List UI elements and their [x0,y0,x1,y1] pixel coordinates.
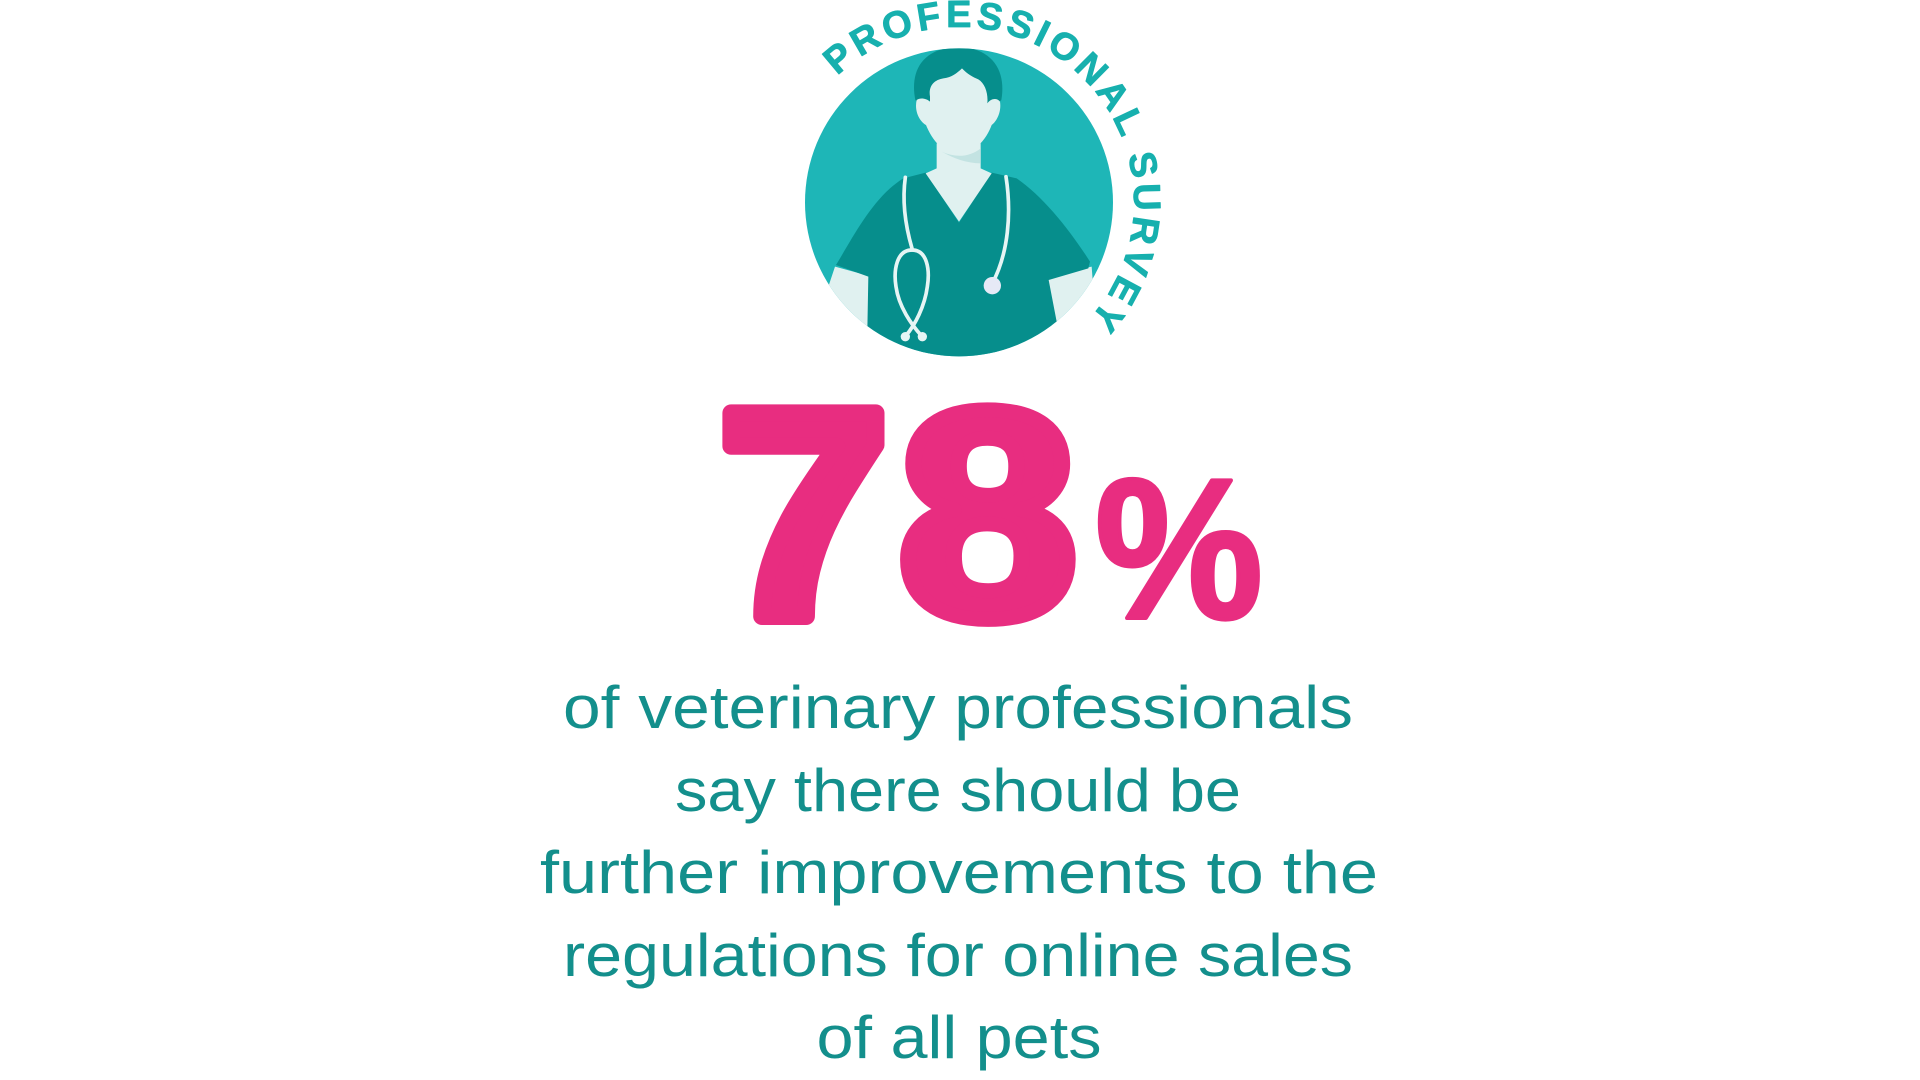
infographic [540,0,1375,1070]
description text: regulations for online sales [563,922,1353,989]
description text [540,674,1378,1071]
arms [829,266,1092,328]
curved label: professional survey: PROFESSIONAL SURVEY [822,0,1161,335]
scrubs [836,173,1090,367]
neck shadow [942,148,981,163]
head [916,68,1000,144]
stethoscope [895,177,1009,336]
hair [914,48,1002,103]
statistic: 78%: 8 [898,349,1077,680]
description text: of all pets [816,1004,1102,1071]
description text: further improvements to the [540,839,1378,906]
statistic: 78%: 7 [718,349,889,679]
description text: say there should be [675,757,1241,824]
statistic: 78% [718,349,1263,680]
description text: of veterinary professionals [563,674,1353,741]
neck [926,143,992,222]
icon: veterinary professional portrait [805,47,1113,367]
statistic: 78%: % [1095,438,1263,661]
